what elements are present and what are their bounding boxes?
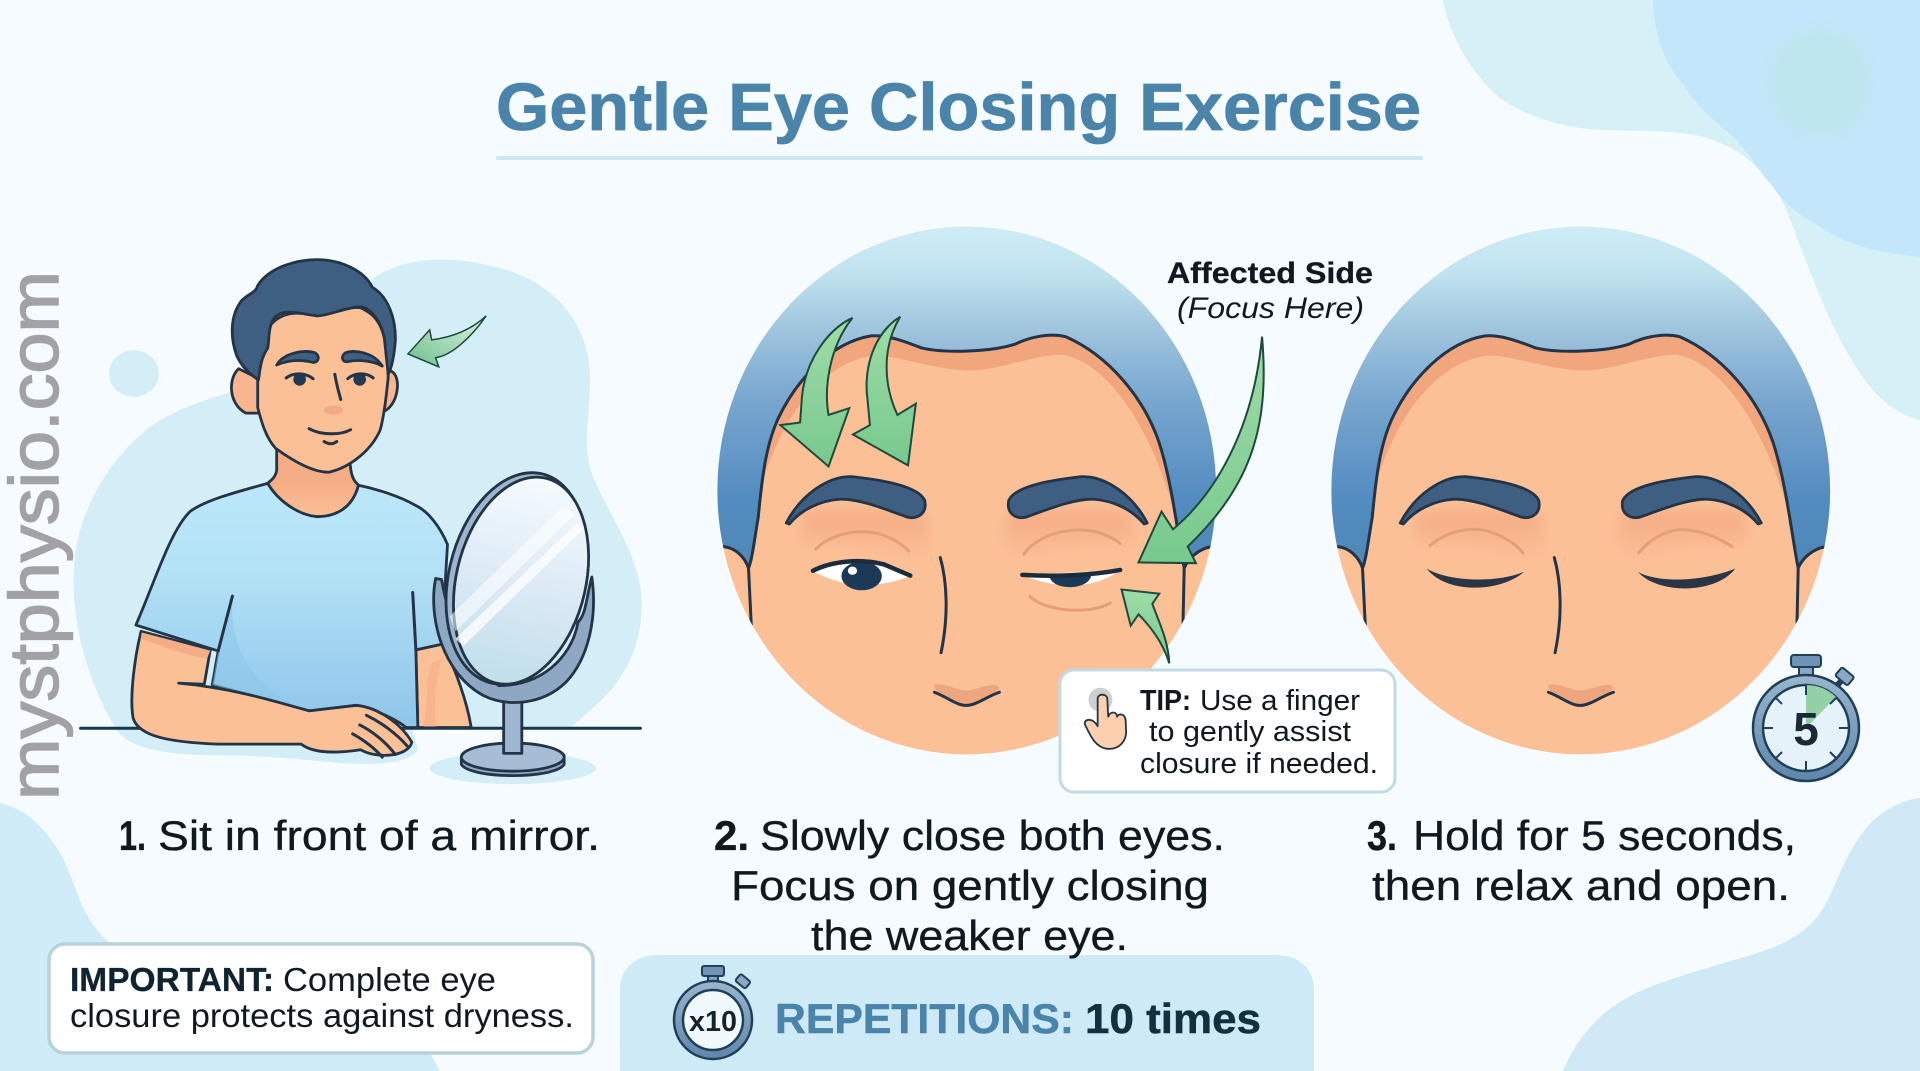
eyes and arrows [780, 317, 1264, 663]
shirt side shading [212, 600, 305, 710]
step 3 text: 3. [1367, 812, 1397, 859]
mirror glass [434, 465, 608, 696]
hair [1331, 226, 1830, 564]
t-shirt [136, 483, 447, 728]
neck [268, 445, 359, 517]
hair [717, 226, 1216, 564]
hairline shade [1374, 335, 1787, 506]
panel: repetitions [620, 955, 1314, 1071]
hairline and sideburns [723, 335, 1211, 625]
eyebrows [277, 351, 318, 365]
label: affected side [1167, 257, 1373, 325]
far arm [416, 644, 471, 728]
callout: important: IMPORTANT: [70, 961, 274, 998]
panel: repetitions: REPETITIONS: [775, 995, 1074, 1042]
green arrow [408, 316, 486, 367]
step 2 text: Slowly close both eyes. [760, 812, 1225, 859]
head circle [717, 226, 1216, 754]
arrow: forehead right [853, 317, 916, 465]
callout: important [49, 944, 593, 1053]
drooping right eye [1022, 570, 1120, 587]
step 1 text: 1. [119, 812, 146, 859]
step 1 text: Sit in front of a mirror. [158, 812, 600, 859]
step 2 text: Focus on gently closing [731, 862, 1209, 909]
panel: step 2 face with eye closing [696, 220, 1264, 762]
mirror [426, 460, 608, 776]
shirt fold lines [218, 593, 416, 651]
step 3 text: Hold for 5 seconds, [1413, 812, 1796, 859]
panel: step 1 person at mirror [74, 260, 642, 784]
step 2 text: 2. [714, 812, 749, 859]
nose shade [324, 406, 343, 415]
finger lines [353, 715, 407, 757]
callout: tip: to gently assist [1149, 716, 1351, 748]
nose tip [934, 684, 999, 705]
step 3 text: then relax and open. [1372, 862, 1790, 909]
callout: important: closure protects against dryness. [70, 997, 574, 1034]
nose [940, 558, 946, 653]
near arm and hand [132, 631, 412, 755]
icon: pointing hand [1085, 688, 1126, 749]
sleeve shadow on arm [141, 632, 210, 658]
callout: tip: closure if needed. [1140, 748, 1378, 780]
open left eye [813, 561, 911, 590]
eyebrows [1400, 477, 1761, 524]
icon: x10 stopwatch [674, 966, 752, 1059]
step 3 text [1367, 812, 1796, 909]
nose [1554, 558, 1560, 653]
reflection streaks [449, 506, 574, 631]
arrow: affected side [1139, 337, 1264, 563]
panel: step 3 face with closed eyes [1331, 226, 1830, 754]
callout: tip: Use a finger [1200, 685, 1360, 717]
step 2 text [714, 812, 1225, 959]
title: Gentle Eye Closing Exercise [496, 70, 1421, 145]
background blob [74, 260, 642, 784]
closed eyes [1427, 568, 1735, 588]
face base [717, 226, 1216, 754]
eye creases [1430, 529, 1732, 553]
callout: tip [1060, 670, 1395, 792]
mirror rim [426, 460, 607, 697]
icon: x10 stopwatch: x10 [689, 1006, 737, 1038]
label: affected side: Affected Side [1167, 257, 1373, 290]
ears [231, 369, 262, 413]
icon: 5 second stopwatch: 5 [1793, 703, 1819, 755]
eye socket shade [803, 510, 1130, 542]
callout: important: Complete eye [283, 961, 496, 998]
callout: tip: TIP: [1140, 685, 1191, 717]
arrow: forehead left [780, 318, 852, 466]
eyebrows [786, 477, 1147, 524]
eyes [293, 373, 366, 386]
hair [232, 260, 395, 380]
hairline shade [760, 335, 1173, 506]
head circle [1331, 226, 1830, 754]
eye creases [816, 530, 1120, 610]
eyelids, nose and mouth [286, 374, 373, 444]
icon: 5 second stopwatch [1753, 655, 1859, 781]
eye socket shade [1417, 510, 1744, 542]
arrow: lower lid [1122, 590, 1169, 663]
nose tip [1548, 684, 1613, 705]
step 2 text: the weaker eye. [811, 912, 1128, 959]
table line [81, 727, 640, 730]
face [258, 307, 388, 472]
hairline and sideburns [1337, 335, 1825, 625]
mirror stand [461, 755, 564, 776]
panel: repetitions: 10 times [1085, 995, 1261, 1042]
label: affected side: (Focus Here) [1177, 292, 1364, 325]
